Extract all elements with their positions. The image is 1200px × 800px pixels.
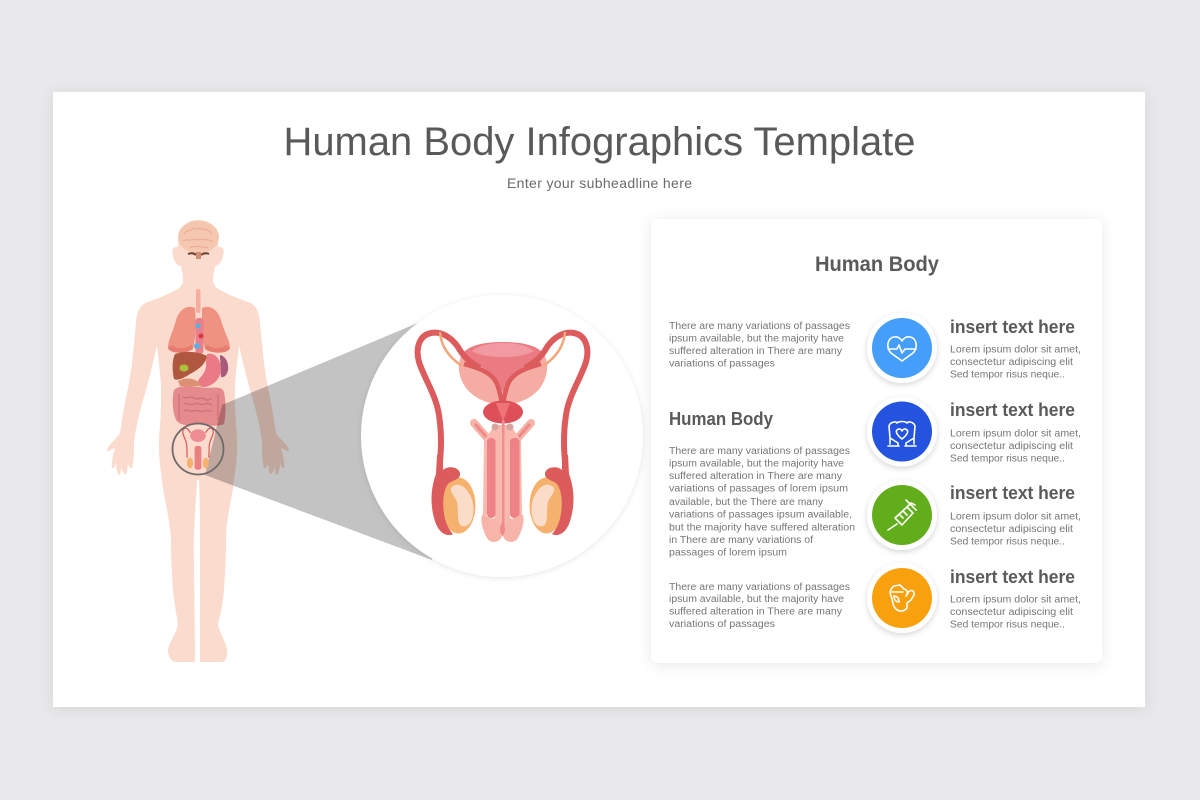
panel heading: Human Body bbox=[815, 253, 939, 276]
left text block 2: suffered alteration in There are many bbox=[669, 471, 842, 482]
left text block 1: ipsum available, but the majority have bbox=[669, 334, 844, 344]
intestines bbox=[173, 386, 226, 426]
left text block 2 bbox=[669, 446, 855, 558]
panel card bbox=[651, 219, 1102, 663]
item 2 text: Lorem ipsum dolor sit amet, bbox=[950, 428, 1081, 440]
item 1 text: Sed tempor risus neque.. bbox=[950, 370, 1065, 380]
item 3 text: Sed tempor risus neque.. bbox=[950, 536, 1065, 548]
anatomy illustration bbox=[418, 332, 587, 542]
item 4 text bbox=[950, 567, 1081, 630]
left text block 2: ipsum available, but the majority have bbox=[669, 458, 844, 470]
heart and vessels bbox=[194, 318, 204, 354]
pancreas bbox=[178, 378, 202, 386]
item 1 text bbox=[950, 317, 1081, 380]
item 1 text: insert text here bbox=[950, 317, 1075, 337]
left text block 2: variations of passages of lorem ipsum bbox=[669, 484, 848, 494]
right crus bbox=[516, 423, 531, 440]
title: Human Body Infographics Template bbox=[284, 120, 916, 164]
item 1 text: Lorem ipsum dolor sit amet, bbox=[950, 344, 1081, 356]
trachea bbox=[196, 289, 200, 313]
prostate bbox=[483, 400, 523, 424]
icon: hands holding heart bbox=[867, 396, 937, 466]
item 2 text: insert text here bbox=[950, 400, 1075, 420]
left crus bbox=[474, 423, 489, 440]
left text block 1: There are many variations of passages bbox=[669, 321, 850, 332]
item 2 text: Sed tempor risus neque.. bbox=[950, 454, 1065, 464]
left vas deferens bbox=[418, 333, 480, 462]
left text block 2: but the majority have suffered alteration bbox=[669, 522, 855, 534]
right testis bbox=[530, 455, 574, 535]
item 3 text: Lorem ipsum dolor sit amet, bbox=[950, 512, 1081, 522]
body silhouette bbox=[107, 220, 289, 662]
orange ducts bbox=[440, 332, 565, 366]
glands bbox=[492, 424, 498, 430]
item 3 text bbox=[950, 483, 1081, 548]
wedge connector bbox=[205, 317, 432, 560]
mini reproductive organs bbox=[183, 428, 213, 470]
item 2 text bbox=[950, 400, 1081, 464]
left text block 3: variations of passages bbox=[669, 619, 775, 630]
icon: brain bbox=[178, 220, 219, 259]
left heading: Human Body bbox=[669, 409, 773, 429]
item 4 text: Lorem ipsum dolor sit amet, bbox=[950, 594, 1081, 606]
highlight ring bbox=[172, 424, 224, 474]
left text block 1 bbox=[669, 321, 850, 370]
left text block 2: There are many variations of passages bbox=[669, 446, 850, 457]
left text block 2: available, but the There are many bbox=[669, 497, 823, 508]
human body figure bbox=[107, 220, 432, 662]
shaft bbox=[483, 425, 522, 532]
left text block 1: suffered alteration in There are many bbox=[669, 346, 842, 357]
bladder and seminal lobes bbox=[459, 342, 547, 404]
item 3 text: insert text here bbox=[950, 483, 1075, 503]
left text block 3 bbox=[669, 582, 850, 630]
left text block 3: suffered alteration in There are many bbox=[669, 606, 842, 618]
item 3 text: consectetur adipiscing elit bbox=[950, 524, 1073, 535]
left text block 2: variations of passages ipsum available, bbox=[669, 510, 852, 520]
left text block 1: variations of passages bbox=[669, 358, 775, 370]
glans bbox=[481, 515, 524, 542]
icon: syringe bbox=[867, 480, 937, 550]
spleen bbox=[220, 355, 228, 377]
item 4 text: insert text here bbox=[950, 567, 1075, 587]
left text block 3: ipsum available, but the majority have bbox=[669, 594, 844, 605]
stomach bbox=[198, 354, 221, 387]
zoom circle bbox=[361, 295, 643, 577]
subheadline: Enter your subheadline here bbox=[507, 175, 692, 191]
slide background bbox=[53, 92, 1145, 707]
right vas deferens bbox=[525, 333, 587, 462]
item 2 text: consectetur adipiscing elit bbox=[950, 441, 1073, 452]
left text block 3: There are many variations of passages bbox=[669, 582, 850, 593]
lungs bbox=[168, 307, 230, 353]
panel: human body bbox=[651, 219, 1102, 663]
item 4 text: Sed tempor risus neque.. bbox=[950, 620, 1065, 630]
circle background bbox=[361, 295, 643, 577]
left testis bbox=[432, 455, 476, 535]
left text block 2: passages of lorem ipsum bbox=[669, 548, 787, 558]
left text block 2: in There are many variations of bbox=[669, 535, 813, 546]
icon: heart with pulse bbox=[867, 313, 937, 383]
item 4 text: consectetur adipiscing elit bbox=[950, 607, 1073, 618]
central duct bbox=[464, 364, 541, 412]
liver bbox=[173, 352, 207, 380]
icon: organ care bbox=[867, 563, 937, 633]
item 1 text: consectetur adipiscing elit bbox=[950, 357, 1073, 368]
gallbladder bbox=[180, 364, 188, 372]
